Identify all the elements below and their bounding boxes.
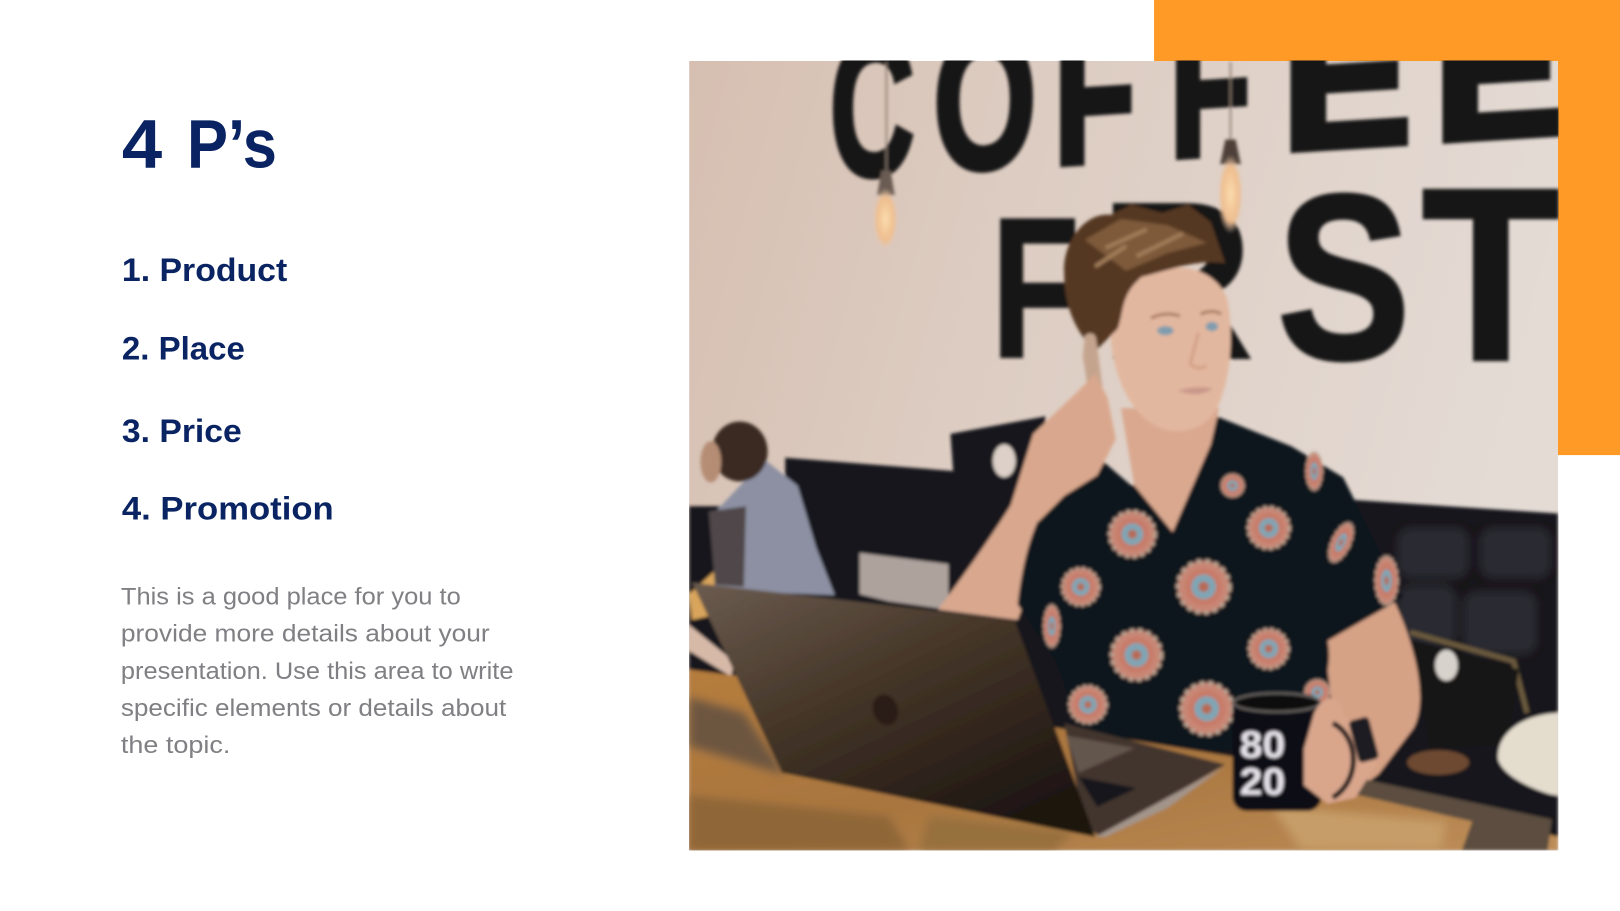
body paragraph: This is a good place for you to bbox=[121, 583, 461, 610]
table darker patches bbox=[689, 697, 1446, 850]
background left objects bbox=[689, 570, 718, 623]
list: 4 P's bbox=[122, 252, 334, 527]
shirt bbox=[1018, 413, 1403, 754]
list item 3: 3. Price bbox=[122, 413, 242, 449]
left arm bbox=[938, 494, 1046, 620]
title: P’s bbox=[187, 106, 277, 182]
background chair cushion bbox=[860, 553, 948, 610]
eyes bbox=[1157, 326, 1174, 335]
round side table bbox=[1498, 713, 1558, 797]
hair bbox=[1064, 205, 1225, 351]
dark bench bbox=[689, 458, 1558, 850]
hand holding phone bbox=[1010, 374, 1116, 522]
wall lettering: COFFEE bbox=[830, 60, 1558, 182]
list item 2: 2. Place bbox=[122, 331, 245, 367]
laptop base bbox=[1064, 723, 1225, 837]
body paragraph: specific elements or details about bbox=[121, 695, 507, 722]
phone bbox=[1081, 330, 1104, 387]
neck and chest bbox=[1121, 408, 1219, 532]
right arm bbox=[1324, 600, 1424, 783]
wall lettering: COFFEE: C bbox=[830, 0, 915, 220]
list item 4: 4. Promotion bbox=[122, 491, 334, 527]
bench tufting bbox=[1397, 527, 1552, 655]
floor dark bbox=[1364, 770, 1558, 837]
apple logo on lid bbox=[872, 694, 898, 725]
wall lettering: FIRST: T bbox=[1422, 138, 1560, 413]
shirt flowers bbox=[1043, 453, 1398, 735]
list item 1: 1. Product bbox=[122, 252, 288, 288]
bag bbox=[1407, 632, 1527, 775]
title: 4 bbox=[122, 106, 162, 182]
mug: 80 bbox=[1240, 723, 1285, 766]
mug: 20 bbox=[1240, 761, 1285, 804]
table bbox=[689, 669, 1558, 850]
laptop lid bbox=[692, 583, 1095, 837]
wall lettering: FIRST: S bbox=[1277, 146, 1411, 409]
pendant lamp right bbox=[1218, 62, 1243, 233]
hand on mug bbox=[1304, 698, 1379, 804]
dark chair behind the arm bbox=[948, 414, 1048, 479]
body paragraph: provide more details about your bbox=[121, 621, 490, 648]
wall lettering: FIRST bbox=[992, 138, 1560, 413]
body paragraph: the topic. bbox=[121, 732, 230, 759]
table frame right bbox=[1338, 777, 1552, 850]
mug bbox=[1233, 693, 1321, 811]
keyboard bbox=[1079, 777, 1136, 807]
wall lettering: FIRST: F bbox=[992, 177, 1079, 399]
wall lettering: FIRST: R bbox=[1100, 157, 1253, 405]
orange accent block bbox=[1154, 0, 1620, 455]
body paragraph: presentation. Use this area to write bbox=[121, 658, 513, 685]
photo: man on phone in coffee shop bbox=[689, 0, 1564, 850]
head bbox=[1064, 205, 1231, 431]
pendant lamp left bbox=[873, 62, 898, 250]
body paragraph bbox=[121, 583, 513, 759]
background man bbox=[700, 422, 835, 595]
